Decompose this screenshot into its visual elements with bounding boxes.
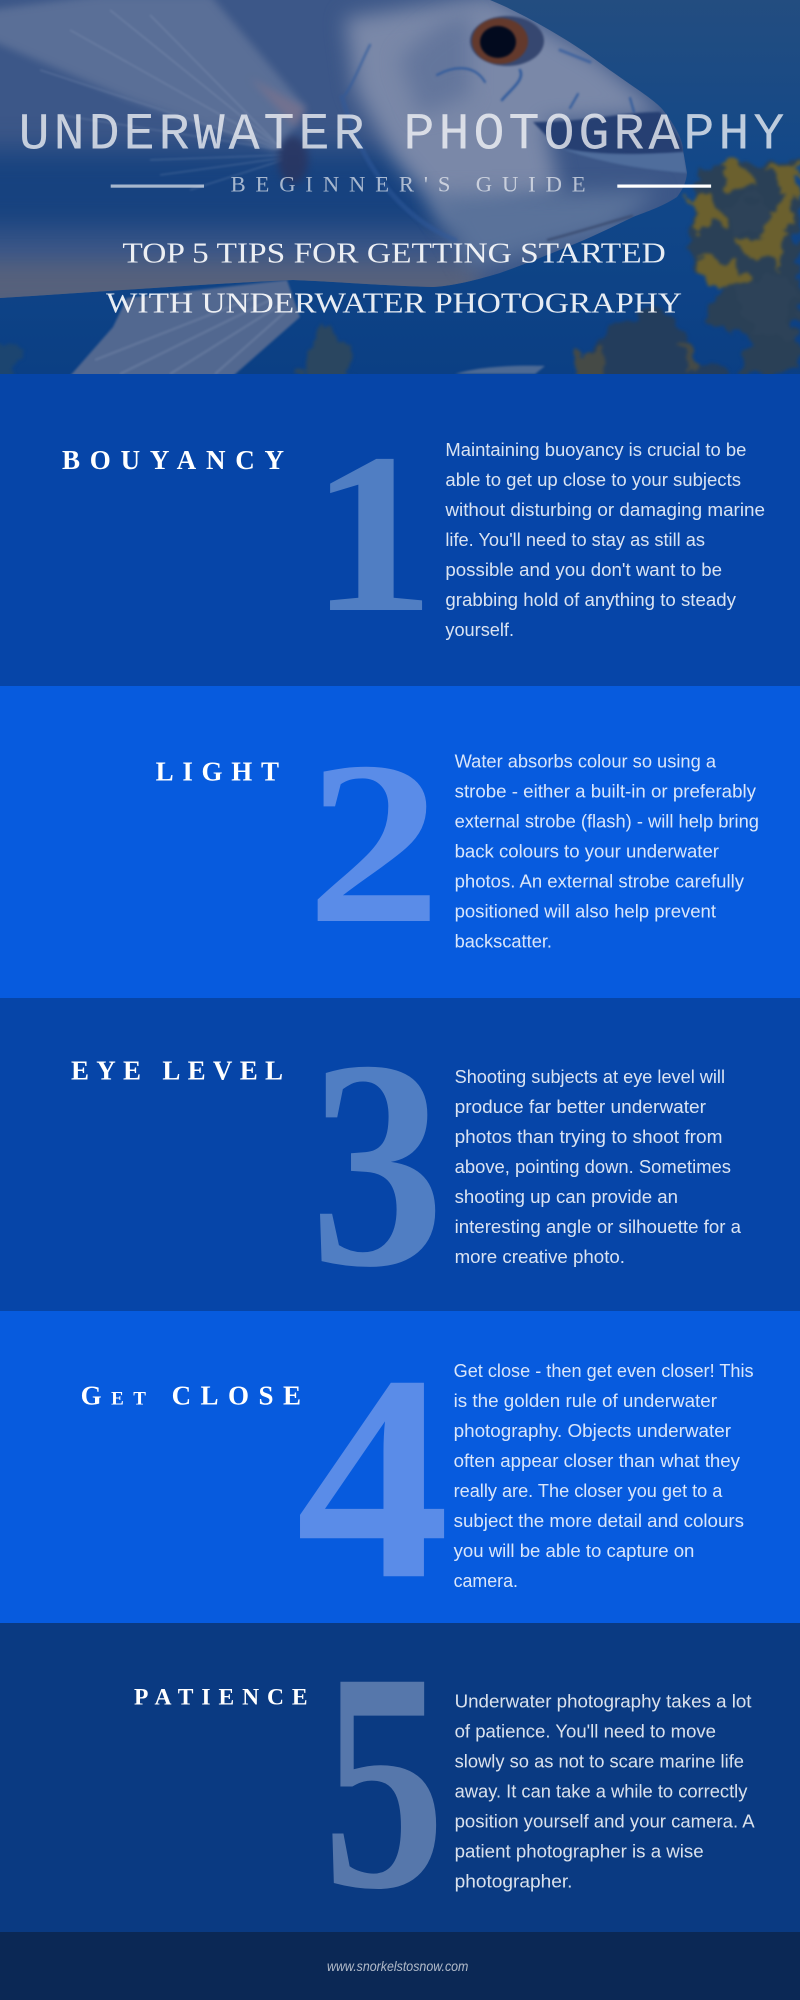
panel: tip 1 bouyancy xyxy=(0,374,800,687)
body text xyxy=(455,751,759,951)
body text: is the golden rule of underwater xyxy=(454,1391,717,1411)
body text: Water absorbs colour so using a xyxy=(455,751,717,771)
panel: tip 2 light xyxy=(0,686,800,999)
kelp right xyxy=(680,160,800,374)
body text: shooting up can provide an xyxy=(455,1187,678,1207)
body text: external strobe (flash) - will help bring xyxy=(455,811,759,831)
body text: photos than trying to shoot from xyxy=(455,1127,722,1147)
panel: tip 3 eye level xyxy=(0,998,800,1329)
head light zone xyxy=(345,0,665,225)
body text: photographer. xyxy=(455,1871,572,1891)
body text: above, pointing down. Sometimes xyxy=(455,1157,731,1177)
body text: often appear closer than what they xyxy=(454,1451,740,1471)
website url: www.snorkelstosnow.com xyxy=(327,1958,469,1974)
heading: PATIENCE xyxy=(134,1685,308,1711)
body text: photography. Objects underwater xyxy=(454,1421,731,1441)
panel: footer xyxy=(0,1932,800,2000)
body text: camera. xyxy=(454,1571,518,1591)
body text: without disturbing or damaging marine xyxy=(444,500,765,520)
numeral 1: 1 xyxy=(310,406,435,660)
tagline: WITH UNDERWATER PHOTOGRAPHY xyxy=(106,287,682,319)
numeral 3: 3 xyxy=(310,999,444,1329)
body text: position yourself and your camera. A xyxy=(455,1811,755,1831)
body text: possible and you don't want to be xyxy=(445,560,722,580)
body text: Underwater photography takes a lot xyxy=(455,1691,752,1711)
kelp bottom xyxy=(0,305,730,374)
fish eye xyxy=(470,16,544,66)
body text xyxy=(455,1691,755,1891)
body text: yourself. xyxy=(445,620,514,640)
body text: you will be able to capture on xyxy=(454,1541,694,1561)
numeral 4: 4 xyxy=(296,1316,450,1641)
numeral 5: 5 xyxy=(323,1608,445,1954)
body text: patient photographer is a wise xyxy=(455,1841,704,1861)
body text: life. You'll need to stay as still as xyxy=(445,530,705,550)
body text xyxy=(444,440,765,640)
body text: of patience. You'll need to move xyxy=(455,1721,716,1741)
fish lower fin xyxy=(70,280,300,376)
tagline: TOP 5 TIPS FOR GETTING STARTED xyxy=(122,238,666,270)
body text: really are. The closer you get to a xyxy=(454,1481,723,1501)
body text: photos. An external strobe carefully xyxy=(455,871,744,891)
panel: header xyxy=(0,0,800,385)
body text: back colours to your underwater xyxy=(455,841,719,861)
body text: Get close - then get even closer! This xyxy=(454,1361,754,1381)
subtitle with rules: BEGINNER'S GUIDE xyxy=(231,172,586,197)
body text: interesting angle or silhouette for a xyxy=(455,1217,742,1237)
body text: away. It can take a while to correctly xyxy=(455,1781,747,1801)
body text: Maintaining buoyancy is crucial to be xyxy=(445,440,746,460)
body text: able to get up close to your subjects xyxy=(445,470,741,490)
pectoral fin xyxy=(0,0,306,152)
body text: positioned will also help prevent xyxy=(455,901,716,921)
body text xyxy=(455,1067,742,1267)
panel: tip 5 patience xyxy=(0,1608,800,1954)
tagline xyxy=(106,238,682,319)
fish body with soft colour zones xyxy=(0,0,687,298)
body text: backscatter. xyxy=(455,931,552,951)
heading: EYE LEVEL xyxy=(71,1055,283,1085)
body text: grabbing hold of anything to steady xyxy=(445,590,736,610)
body text: Shooting subjects at eye level will xyxy=(455,1067,725,1087)
fish gill and marks xyxy=(342,45,634,240)
heading: BOUYANCY xyxy=(62,445,284,475)
heading: LIGHT xyxy=(156,756,279,786)
panel: tip 4 get close xyxy=(0,1311,800,1641)
subtitle with rules xyxy=(111,172,711,197)
body text: slowly so as not to scare marine life xyxy=(455,1751,744,1771)
numeral 2: 2 xyxy=(306,713,441,972)
heading: Get CLOSE xyxy=(81,1380,301,1410)
fish mouth xyxy=(533,112,684,154)
body text: subject the more detail and colours xyxy=(454,1511,744,1531)
body text: produce far better underwater xyxy=(455,1097,706,1117)
body text: more creative photo. xyxy=(455,1247,625,1267)
body text xyxy=(454,1361,754,1591)
title: UNDERWATER PHOTOGRAPHY xyxy=(18,106,784,165)
body text: strobe - either a built-in or preferably xyxy=(455,781,756,801)
header photo: fish and kelp xyxy=(0,0,800,385)
